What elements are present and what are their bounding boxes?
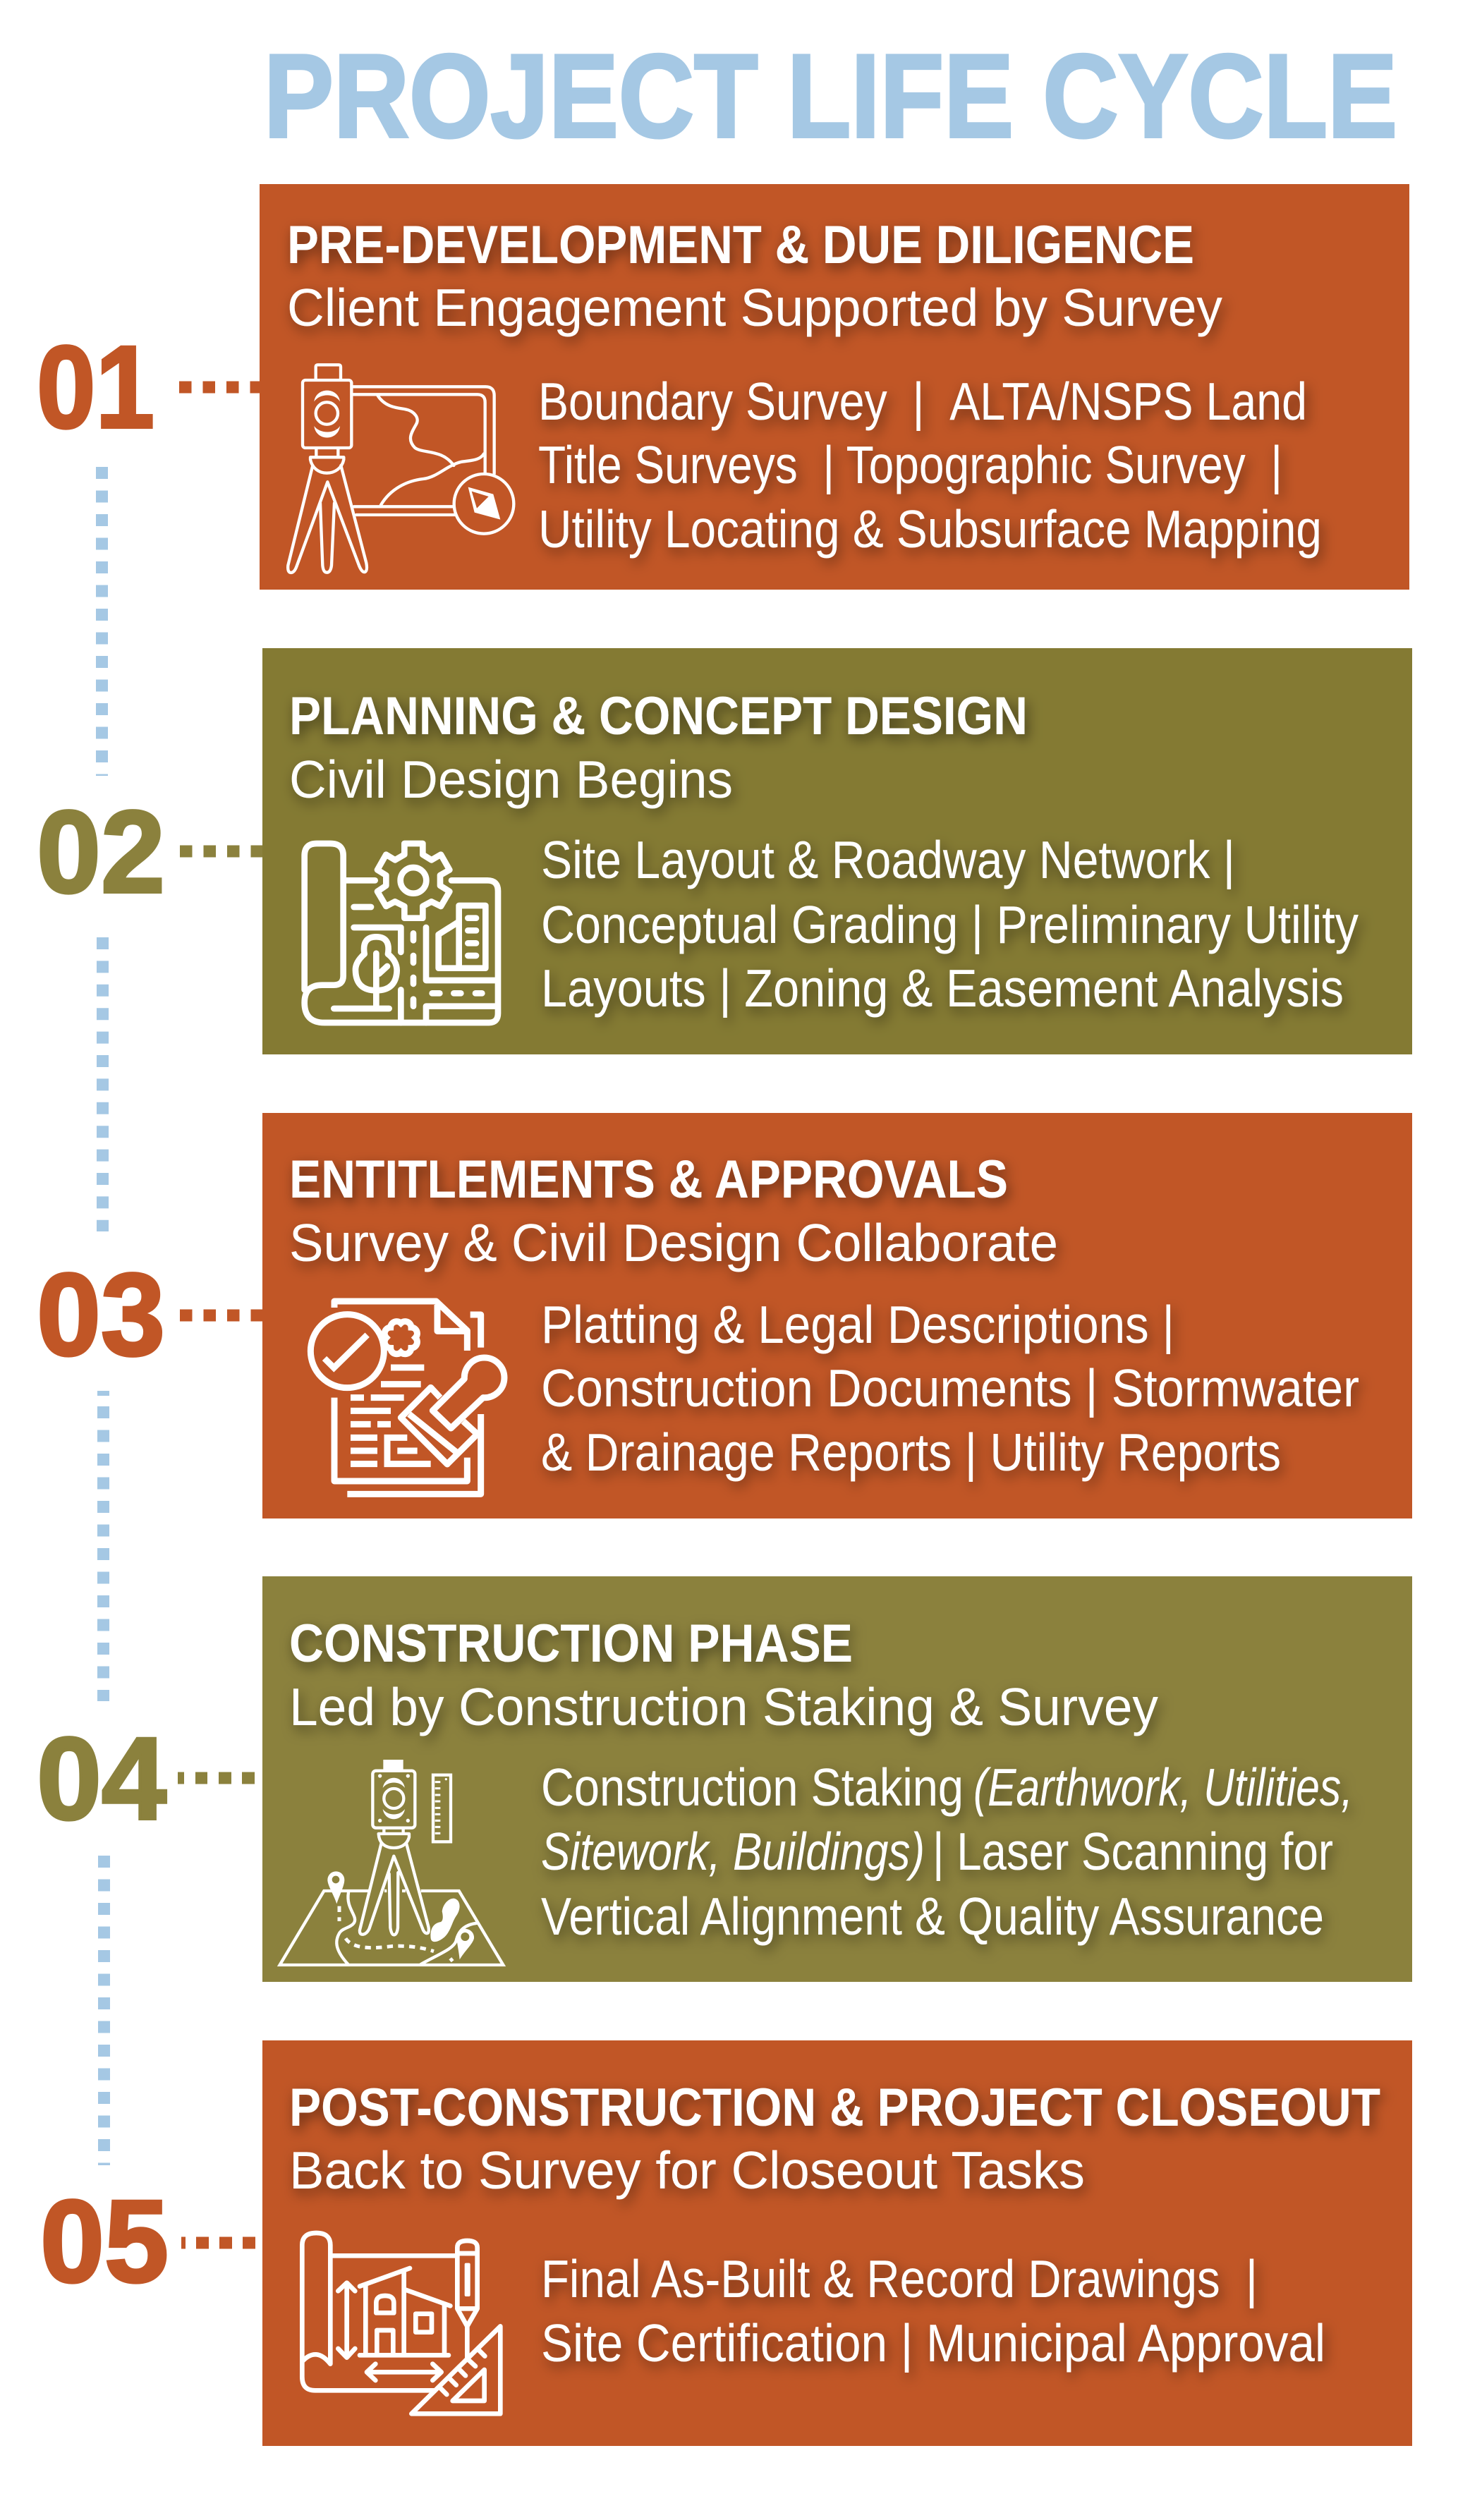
subheading: pre-development: Client Engagement Supported by Survey xyxy=(287,278,1222,337)
body text: pre-development: Utility Locating & Subsurface Mapping xyxy=(538,499,1322,559)
panel: entitlements xyxy=(262,1113,1412,1518)
panel: planning xyxy=(262,648,1412,1054)
number 05: 05 xyxy=(40,2177,169,2307)
body text: post-construction xyxy=(541,2249,1325,2373)
subheading: post-construction: Back to Survey for Closeout Tasks xyxy=(289,2141,1085,2200)
dotted leader 02 xyxy=(180,845,262,858)
body text: entitlements: Construction Documents | Stormwater xyxy=(541,1358,1359,1418)
heading: planning: PLANNING & CONCEPT DESIGN xyxy=(289,686,1028,746)
number 01: 01 xyxy=(37,322,154,453)
icon: total station on site map xyxy=(280,1760,503,1965)
subheading: construction phase: Led by Construction Staking & Survey xyxy=(289,1677,1158,1736)
body text: construction phase: Construction Staking xyxy=(541,1758,964,1817)
body text: pre-development: Title Surveys | Topographic Survey | xyxy=(538,435,1282,494)
body text: pre-development: Boundary Survey | ALTA/NSPS Land xyxy=(538,372,1307,431)
body text: planning: Site Layout & Roadway Network | xyxy=(541,830,1235,889)
timeline connector: 03 to 04 xyxy=(97,1391,109,1701)
body text: pre-development xyxy=(538,372,1322,559)
body text: entitlements: Platting & Legal Descriptions | xyxy=(541,1295,1174,1354)
icon: house blueprint with pencil and set square xyxy=(302,2233,500,2414)
number 04: 04 xyxy=(37,1714,166,1844)
subheading: entitlements: Survey & Civil Design Collaborate xyxy=(289,1213,1058,1272)
body text: post-construction: Final As-Built & Record Drawings | xyxy=(541,2249,1258,2308)
icon: document with stamp xyxy=(310,1301,504,1494)
body text: planning xyxy=(541,830,1359,1018)
body text: construction phase: Vertical Alignment & Quality Assurance xyxy=(541,1887,1324,1946)
heading: construction phase: CONSTRUCTION PHASE xyxy=(289,1614,853,1674)
number 03: 03 xyxy=(37,1250,165,1380)
body text: post-construction: Site Certification | Municipal Approval xyxy=(541,2313,1325,2373)
heading: pre-development: PRE-DEVELOPMENT & DUE DILIGENCE xyxy=(287,215,1194,275)
dotted leader 03 xyxy=(180,1309,262,1322)
body text: entitlements xyxy=(541,1295,1359,1482)
dotted leader 05 xyxy=(181,2237,255,2248)
number 02: 02 xyxy=(37,787,165,918)
body text: construction phase: Sitework, Buildings) xyxy=(541,1822,925,1881)
body text: construction phase: | Laser Scanning for xyxy=(933,1822,1333,1881)
panel: construction phase xyxy=(262,1576,1412,1982)
timeline connector: 02 to 03 xyxy=(97,937,109,1231)
panel: pre-development xyxy=(260,184,1409,590)
dotted leader 04 xyxy=(178,1772,255,1784)
body text: entitlements: & Drainage Reports | Utility Reports xyxy=(541,1423,1281,1482)
heading: entitlements: ENTITLEMENTS & APPROVALS xyxy=(289,1150,1008,1210)
panel: post-construction xyxy=(262,2040,1412,2446)
body text: construction phase: (Earthwork, Utilities, xyxy=(973,1758,1353,1817)
body text: construction phase xyxy=(541,1758,1353,1946)
dotted leader 01 xyxy=(179,381,260,394)
timeline connector: 04 to 05 xyxy=(98,1856,110,2165)
icon: site plan with gear xyxy=(305,844,498,1023)
timeline connector: 01 to 02 xyxy=(96,467,108,776)
body text: planning: Conceptual Grading | Preliminary Utility xyxy=(541,895,1359,954)
subheading: planning: Civil Design Begins xyxy=(289,750,733,809)
body text: planning: Layouts | Zoning & Easement Analysis xyxy=(541,958,1344,1018)
icon: total station and site map xyxy=(288,365,514,573)
